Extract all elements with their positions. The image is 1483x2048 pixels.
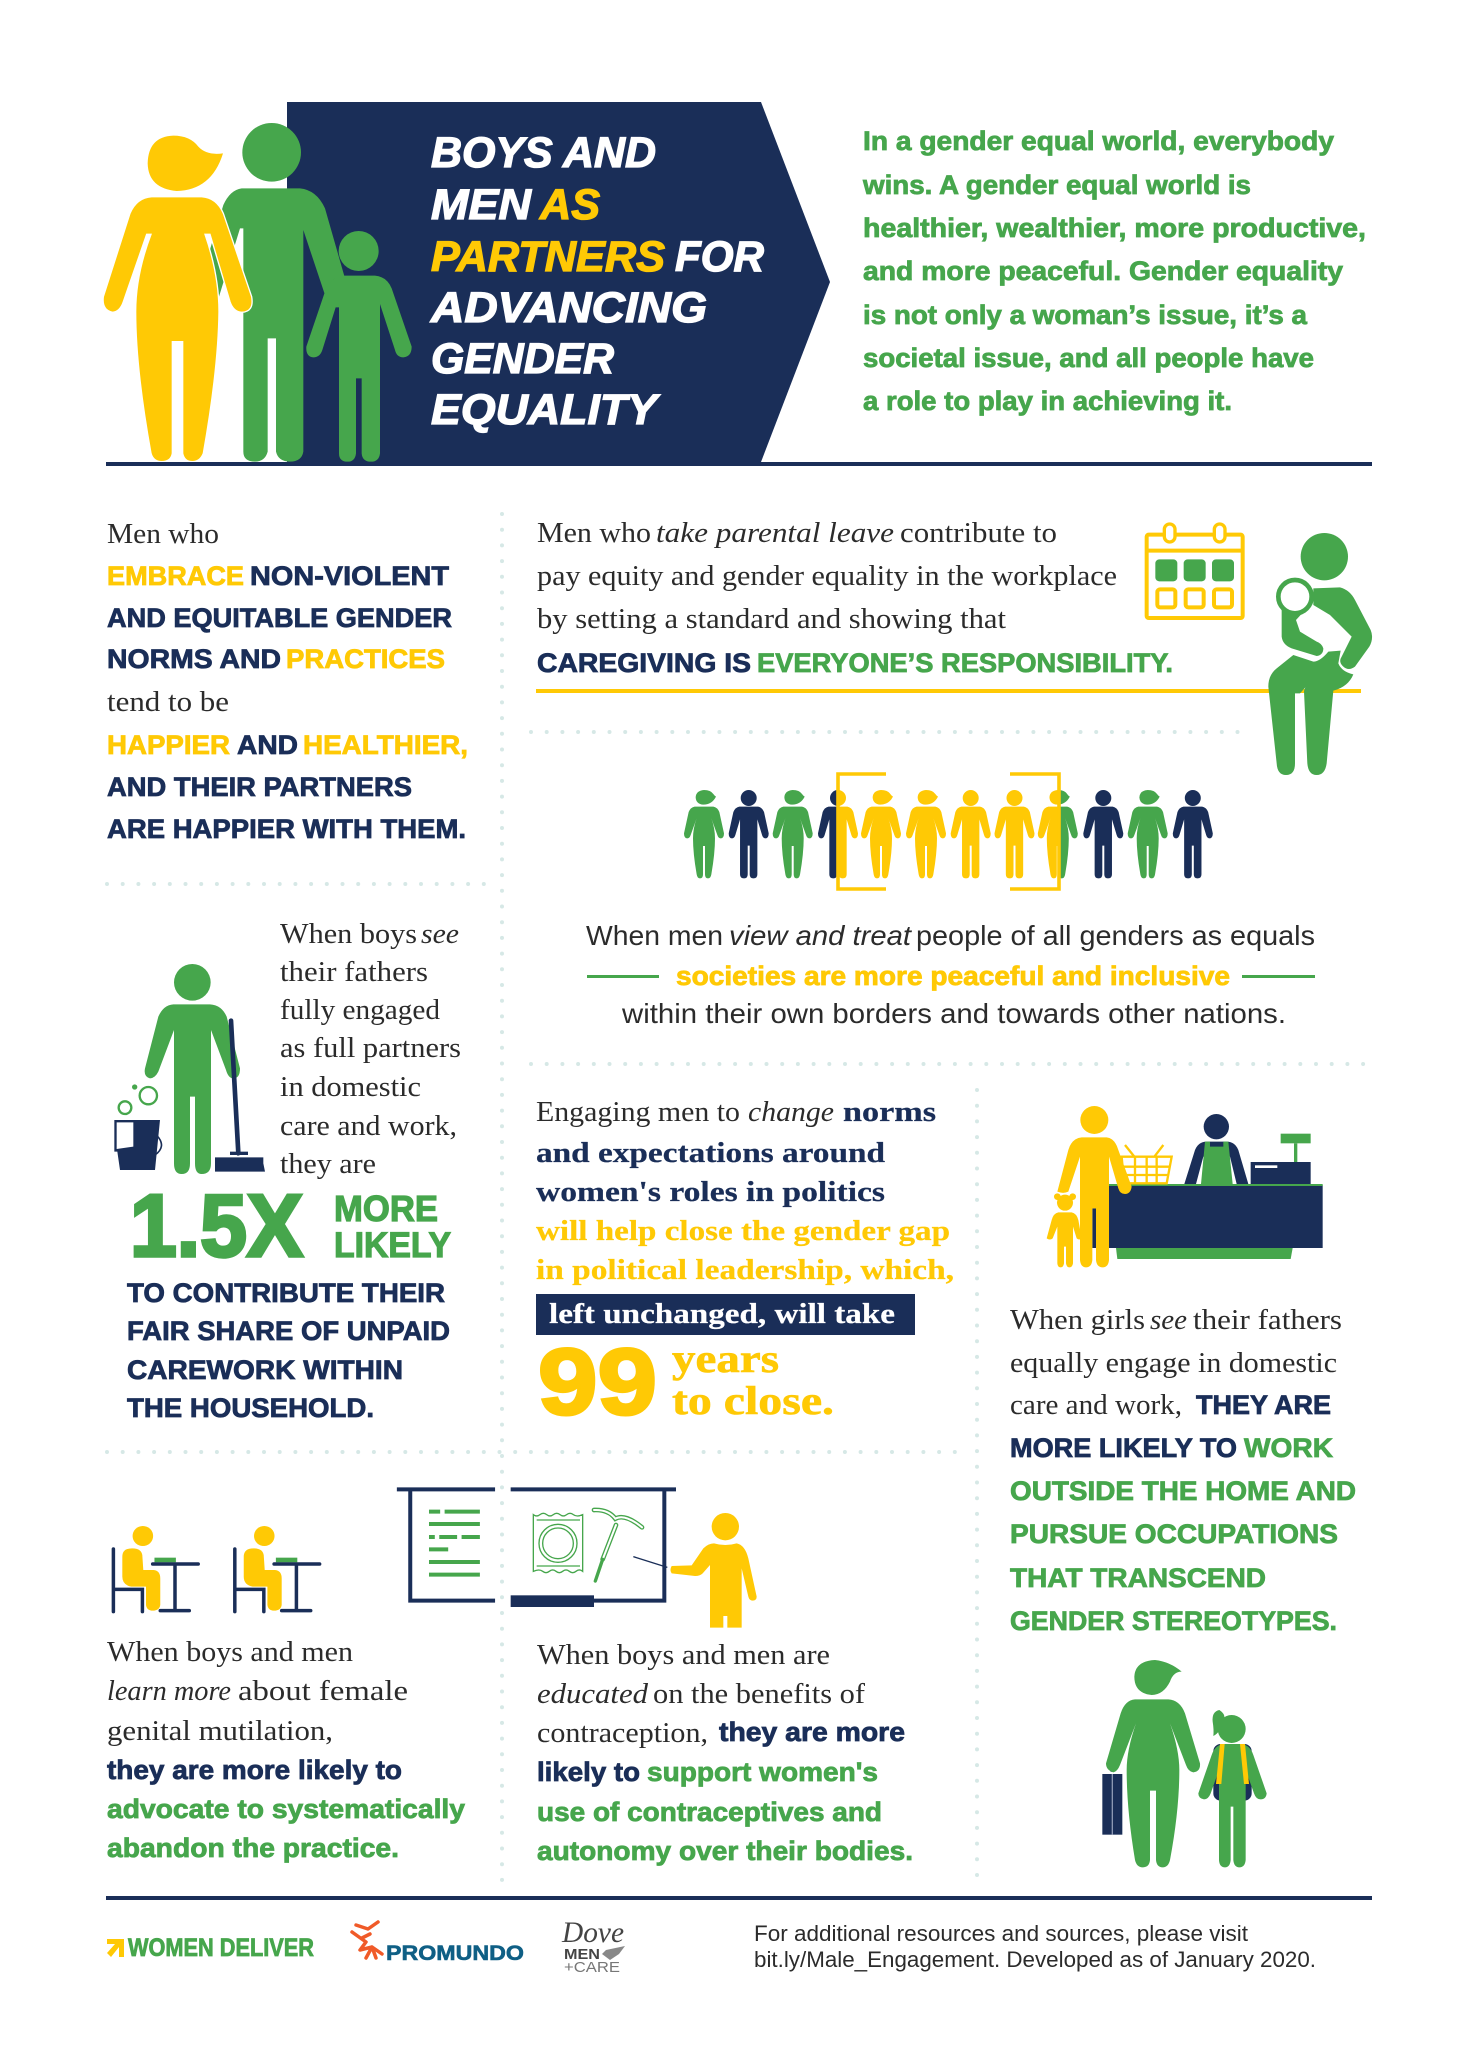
- domestic care text: When boys: [280, 918, 417, 950]
- panel: domestic care: [114, 918, 461, 1423]
- equals text: [586, 920, 1315, 1029]
- parental leave text: by setting a standard and showing that: [537, 603, 1006, 635]
- panel: equitable norms text: NON-VIOLENT: [250, 561, 450, 591]
- icon: calendar: [1147, 524, 1243, 618]
- equals text: within their own borders and towards other nations.: [621, 998, 1286, 1029]
- title: FOR: [675, 233, 764, 281]
- FGM text: learn more: [107, 1675, 231, 1707]
- icon: man with mop and bucket: [114, 964, 265, 1174]
- domestic care text: fully engaged: [280, 994, 440, 1026]
- title: BOYS AND: [431, 129, 656, 177]
- title: PARTNERS: [431, 233, 665, 281]
- logo: Dove Men+Care: +CARE: [564, 1959, 620, 1976]
- FGM text: they are more likely to: [107, 1755, 402, 1785]
- icon: teacher at whiteboard: [397, 1489, 757, 1628]
- title: [430, 129, 764, 434]
- equals text: When men: [586, 920, 723, 951]
- navy arrow banner: [287, 102, 830, 462]
- carework text: FAIR SHARE OF UNPAID: [127, 1316, 450, 1346]
- domestic care text: they are: [280, 1148, 376, 1180]
- panel: parental leave: [536, 517, 1372, 775]
- logo: Women Deliver: WOMEN DELIVER: [128, 1934, 314, 1962]
- equals text: view and treat: [729, 920, 912, 951]
- contraception text: support women's: [647, 1757, 878, 1787]
- title: GENDER: [431, 335, 614, 383]
- contraception text: they are more: [719, 1717, 905, 1747]
- carework text: THE HOUSEHOLD.: [127, 1393, 374, 1423]
- panel: equitable norms text: Men who: [107, 518, 219, 550]
- panel: equitable norms text: tend to be: [107, 686, 229, 718]
- icon: seated man holding baby: [1268, 533, 1372, 775]
- parental leave text: EVERYONE’S RESPONSIBILITY.: [757, 648, 1173, 678]
- FGM text: advocate to systematically: [107, 1794, 465, 1824]
- logo: Dove Men+Care: Dove: [561, 1916, 624, 1949]
- girls text: THAT TRANSCEND: [1010, 1563, 1266, 1593]
- contraception text: use of contraceptives and: [537, 1797, 882, 1827]
- stat: 1.5X more likely: LIKELY: [334, 1226, 451, 1265]
- domestic care text: their fathers: [280, 956, 428, 988]
- contraception text: educated: [537, 1678, 649, 1710]
- contraception text: likely to: [537, 1757, 640, 1787]
- panel: equitable norms text: AND THEIR PARTNERS: [107, 772, 412, 802]
- equals text: societies are more peaceful and inclusive: [676, 961, 1230, 991]
- stat: 1.5X more likely: 1.5X: [130, 1176, 303, 1275]
- carework text: TO CONTRIBUTE THEIR: [127, 1278, 445, 1308]
- politics text: and expectations around: [536, 1137, 885, 1169]
- intro text: wins. A gender equal world is: [862, 170, 1251, 200]
- girls text: PURSUE OCCUPATIONS: [1010, 1519, 1338, 1549]
- title: EQUALITY: [431, 386, 660, 434]
- icon: mother with briefcase and daughter with backpack: [1102, 1660, 1267, 1867]
- panel: equals: [586, 774, 1315, 1029]
- stat: 1.5X more likely: MORE: [334, 1188, 438, 1229]
- intro text: In a gender equal world, everybody: [863, 126, 1334, 156]
- FGM text: abandon the practice.: [107, 1833, 399, 1863]
- highlighted bar: [536, 1294, 915, 1335]
- domestic care text: [280, 918, 461, 1180]
- contraception text: autonomy over their bodies.: [537, 1836, 913, 1866]
- politics text: women's roles in politics: [536, 1176, 885, 1208]
- carework text: CAREWORK WITHIN: [127, 1355, 403, 1385]
- parental leave text: take parental leave: [656, 517, 894, 549]
- logo: Dove Men+Care: MEN: [564, 1946, 600, 1963]
- stat: 1.5X more likely: [130, 1176, 451, 1275]
- footer: [106, 1896, 1372, 1976]
- FGM text: When boys and men: [107, 1636, 354, 1668]
- contraception text: contraception,: [537, 1717, 708, 1749]
- girls text: [1010, 1304, 1356, 1636]
- politics text: will help close the gender gap: [536, 1215, 950, 1247]
- parental leave text: CAREGIVING IS: [537, 648, 751, 678]
- parental leave text: contribute to: [900, 517, 1057, 549]
- domestic care text: in domestic: [280, 1071, 421, 1103]
- panel: contraception education: [397, 1489, 913, 1866]
- icon: row of people with yellow bracket: [684, 774, 1213, 889]
- FGM text: genital mutilation,: [107, 1715, 333, 1747]
- icon: family of woman, man and boy: [103, 123, 412, 462]
- panel: equitable norms text: EMBRACE: [107, 561, 244, 591]
- panel: equitable norms text: HEALTHIER,: [303, 730, 468, 760]
- politics text: norms: [843, 1096, 936, 1128]
- intro text: a role to play in achieving it.: [863, 386, 1232, 416]
- girls text: OUTSIDE THE HOME AND: [1010, 1476, 1356, 1506]
- panel: equitable norms text: HAPPIER: [107, 730, 230, 760]
- FGM text: [107, 1636, 465, 1863]
- header rule: [106, 462, 1372, 466]
- intro text: [862, 126, 1366, 416]
- domestic care text: as full partners: [280, 1032, 461, 1064]
- panel: female genital mutilation education: [107, 1526, 465, 1863]
- title: MEN: [431, 181, 532, 229]
- girls text: see: [1150, 1304, 1187, 1336]
- panel: equitable norms text: ARE HAPPIER WITH THEM.: [107, 814, 466, 844]
- FGM text: about female: [238, 1675, 408, 1707]
- title: ADVANCING: [430, 284, 707, 332]
- contraception text: on the benefits of: [653, 1678, 865, 1710]
- domestic care text: care and work,: [280, 1110, 457, 1142]
- panel: equitable norms text: AND: [237, 730, 298, 760]
- logo: Promundo: [352, 1922, 524, 1965]
- contraception text: [537, 1639, 913, 1866]
- girls text: MORE LIKELY TO: [1010, 1433, 1237, 1463]
- politics text: [536, 1096, 954, 1286]
- parental leave text: Men who: [537, 517, 651, 549]
- girls text: WORK: [1244, 1433, 1334, 1463]
- highlighted bar: left unchanged, will take: [549, 1298, 895, 1330]
- logo: Promundo: PROMUNDO: [386, 1942, 524, 1965]
- intro text: and more peaceful. Gender equality: [863, 256, 1343, 286]
- stat: 99 years to close: years: [672, 1336, 779, 1381]
- intro text: is not only a woman’s issue, it’s a: [863, 300, 1308, 330]
- girls text: THEY ARE: [1196, 1390, 1331, 1420]
- panel: equitable norms text: [107, 518, 468, 844]
- stat: 99 years to close: [538, 1329, 834, 1434]
- icon: father and daughter at checkout: [1047, 1106, 1323, 1267]
- intro text: healthier, wealthier, more productive,: [863, 213, 1366, 243]
- panel: equitable norms text: NORMS AND: [107, 644, 281, 674]
- girls text: When girls: [1010, 1304, 1145, 1336]
- panel: equitable norms text: AND EQUITABLE GENDER: [107, 603, 452, 633]
- carework text: [127, 1278, 450, 1423]
- icon: two students at desks: [113, 1526, 320, 1612]
- stat: 99 years to close: 99: [538, 1329, 657, 1434]
- politics text: Engaging men to: [536, 1096, 740, 1128]
- politics text: in political leadership, which,: [536, 1254, 954, 1286]
- domestic care text: see: [421, 918, 459, 950]
- panel: girls and fathers: [1010, 1106, 1356, 1867]
- equals text: people of all genders as equals: [916, 920, 1315, 951]
- intro text: societal issue, and all people have: [863, 343, 1314, 373]
- girls text: care and work,: [1010, 1389, 1182, 1421]
- panel: equitable norms text: PRACTICES: [286, 644, 445, 674]
- logo: Dove Men+Care: [561, 1916, 625, 1976]
- stat: 99 years to close: to close.: [672, 1378, 834, 1423]
- infographic: [104, 102, 1372, 1972]
- parental leave text: [537, 517, 1173, 678]
- panel: header banner: [103, 102, 1372, 466]
- contraception text: When boys and men are: [537, 1639, 830, 1671]
- girls text: their fathers: [1193, 1304, 1342, 1336]
- girls text: equally engage in domestic: [1010, 1347, 1337, 1379]
- footer note: [754, 1921, 1316, 1972]
- girls text: GENDER STEREOTYPES.: [1010, 1606, 1337, 1636]
- footer note: For additional resources and sources, please visit: [754, 1921, 1248, 1946]
- parental leave text: pay equity and gender equality in the workplace: [537, 560, 1117, 592]
- footer note: bit.ly/Male_Engagement. Developed as of January 2020.: [754, 1947, 1316, 1972]
- politics text: change: [748, 1096, 834, 1128]
- title: AS: [539, 181, 600, 229]
- panel: politics: [536, 1096, 954, 1434]
